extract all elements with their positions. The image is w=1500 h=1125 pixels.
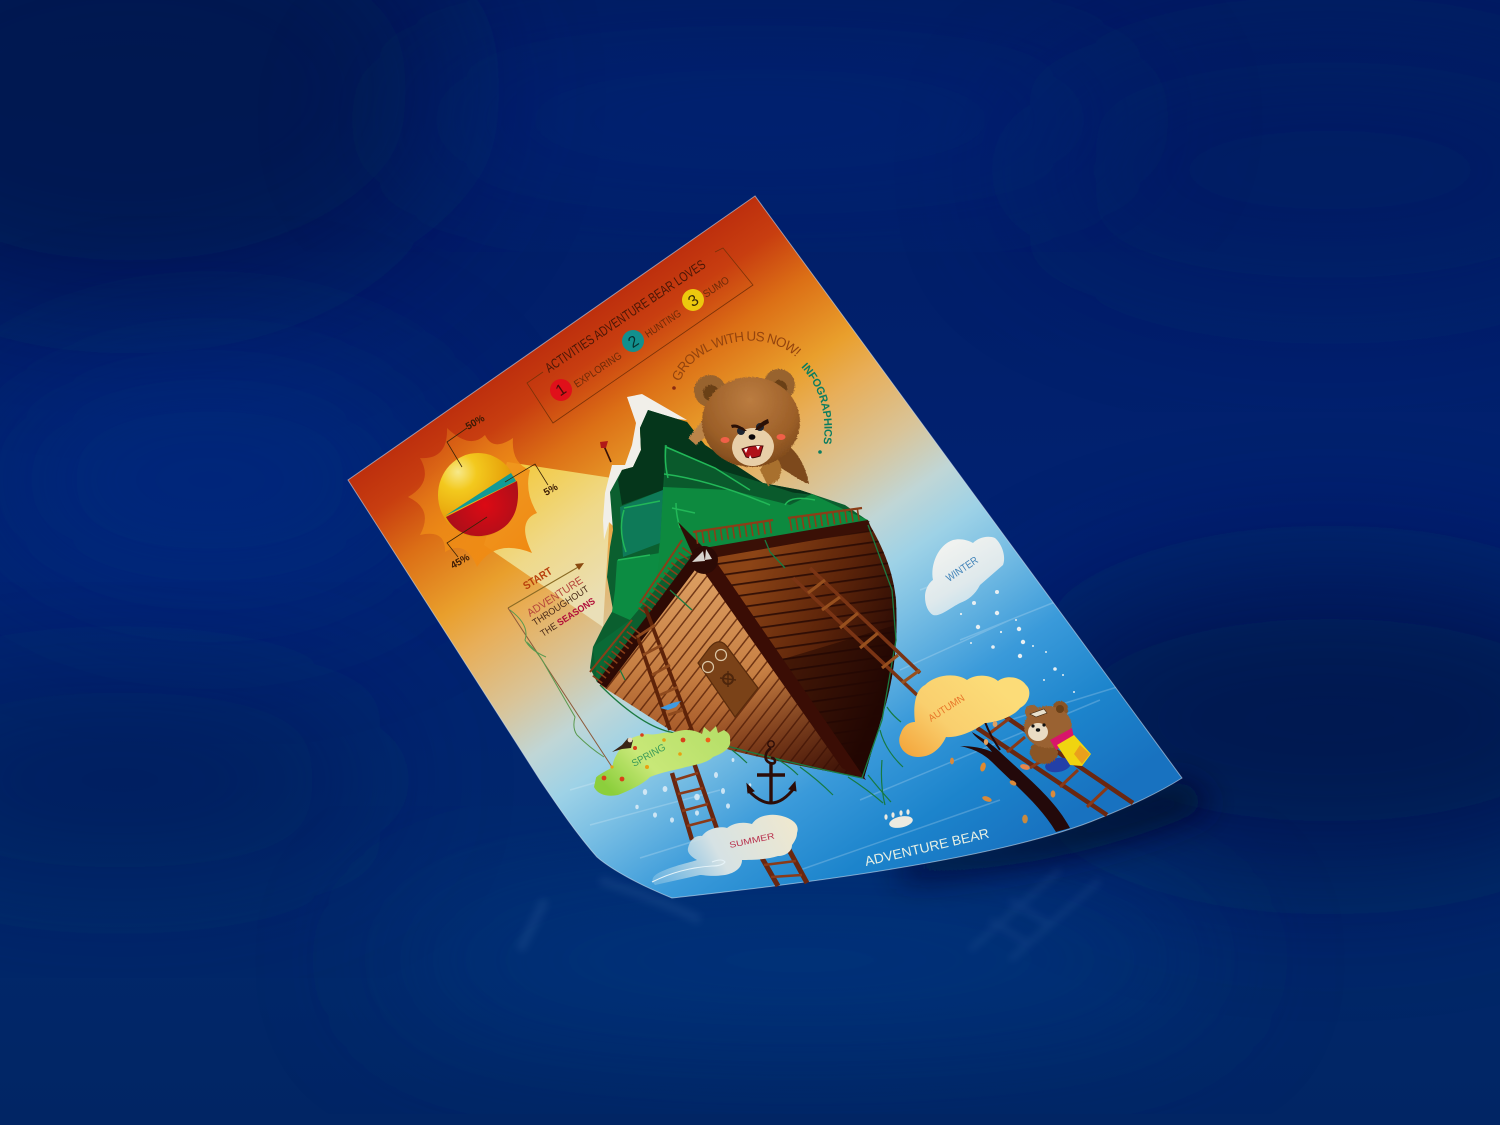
small bear body xyxy=(1024,701,1072,764)
flag on the mountain side xyxy=(600,441,611,462)
small bear face xyxy=(1028,705,1064,741)
mountain silhouette xyxy=(590,410,870,682)
autumn cloud xyxy=(899,675,1029,757)
falling leaves xyxy=(950,721,1055,823)
ladder on the left face xyxy=(637,607,693,733)
bear ears xyxy=(694,369,795,407)
blue trousers xyxy=(1044,756,1072,774)
curved slogan xyxy=(672,331,832,454)
door xyxy=(698,642,758,717)
railing: deck middle xyxy=(693,520,773,538)
bear body and paws xyxy=(688,420,809,486)
snow under the winter cloud xyxy=(960,590,1075,693)
spring cloud: SPRING xyxy=(630,742,668,770)
rain drops xyxy=(635,758,751,823)
darkest upper slope xyxy=(618,410,815,505)
small bear climbing with backpack xyxy=(1024,701,1091,774)
anchor xyxy=(747,741,796,803)
hull backing xyxy=(600,522,868,778)
rope and vine xyxy=(508,608,612,767)
ladder: bottom section xyxy=(762,848,807,886)
item 3 sumo: 3 xyxy=(685,292,702,311)
sun red segment 45% xyxy=(446,481,518,536)
bear face xyxy=(720,419,786,469)
chart: sun pie chart xyxy=(408,413,560,572)
item 3 sumo: SUMO xyxy=(701,274,732,300)
icon: bear paw print xyxy=(884,809,914,830)
railing: front left xyxy=(590,620,637,680)
sun teal segment 5% xyxy=(445,473,516,516)
bear head xyxy=(702,377,800,467)
snow peak xyxy=(603,394,687,540)
light beam from the sun xyxy=(484,462,612,627)
hull right face xyxy=(708,522,897,778)
bright green slope xyxy=(655,487,868,588)
summer cloud xyxy=(652,815,798,885)
faint reflection of the ladders xyxy=(520,870,1100,960)
activities heading: ACTIVITIES ADVENTURE BEAR LOVES xyxy=(542,257,708,375)
label 50%: 50% xyxy=(464,413,487,433)
blue bird xyxy=(660,701,681,710)
start heading: START xyxy=(521,565,555,593)
item 2 hunting: 2 xyxy=(625,333,642,352)
item 1 exploring: 1 xyxy=(553,381,570,400)
mountain island xyxy=(590,394,870,682)
railing: deck right xyxy=(788,508,862,525)
label 5% xyxy=(505,464,560,499)
label 5%: 5% xyxy=(542,482,560,499)
label 45%: 45% xyxy=(449,552,472,572)
keel edge xyxy=(704,550,866,780)
infographic poster sheet xyxy=(347,195,1183,898)
sky streaks xyxy=(570,586,1116,870)
tree xyxy=(960,722,1070,832)
winter cloud: WINTER xyxy=(944,554,981,584)
autumn cloud: AUTUMN xyxy=(927,693,967,725)
ladder: lower left section xyxy=(672,760,718,840)
mid green band xyxy=(664,445,810,505)
curved slogan: INFOGRAPHICS xyxy=(802,362,832,444)
paper shadow on the floor xyxy=(900,778,1215,880)
throughout text: THROUGHOUT xyxy=(531,584,591,629)
adventure text: ADVENTURE xyxy=(525,575,585,620)
item 3 sumo xyxy=(682,274,732,311)
ship wheel ornament and prow spike xyxy=(678,522,718,574)
label 50% xyxy=(447,413,487,467)
hull left face xyxy=(600,562,864,778)
item 1 exploring: EXPLORING xyxy=(572,350,624,390)
deck edges xyxy=(704,520,872,558)
start block: adventure throughout the seasons xyxy=(508,563,612,767)
item 2 hunting xyxy=(622,308,684,352)
item 1 exploring xyxy=(550,350,624,401)
brand name: adventure bear: ADVENTURE BEAR xyxy=(863,826,991,869)
winter cloud xyxy=(925,537,1004,615)
panel: activities adventure bear loves xyxy=(527,248,753,423)
spring cloud xyxy=(594,726,730,796)
yellow backpack xyxy=(1050,728,1091,766)
mountain highlights xyxy=(618,445,815,560)
long ladder upper section on the hull xyxy=(793,568,920,695)
activities frame xyxy=(527,248,753,423)
sun rays xyxy=(408,428,537,567)
start arrow xyxy=(508,566,580,608)
summer cloud: SUMMER xyxy=(728,831,775,850)
wooden ark hull xyxy=(590,508,903,805)
big angry bear xyxy=(600,369,809,486)
teal green slope xyxy=(620,490,663,557)
item 2 hunting: HUNTING xyxy=(643,308,684,340)
long ladder lower section xyxy=(977,713,1133,815)
bird perched on spring xyxy=(612,738,633,752)
the seasons text: THE SEASONS xyxy=(539,596,597,640)
lower left slope xyxy=(612,553,660,620)
label 45% xyxy=(447,517,487,572)
flowers xyxy=(602,733,710,781)
vines on hull xyxy=(600,525,896,778)
poster paper xyxy=(348,196,1182,898)
railing: rear left xyxy=(640,540,688,612)
sun yellow segment 50% xyxy=(438,453,518,537)
curved slogan: GROWL WITH US NOW! xyxy=(672,331,802,380)
